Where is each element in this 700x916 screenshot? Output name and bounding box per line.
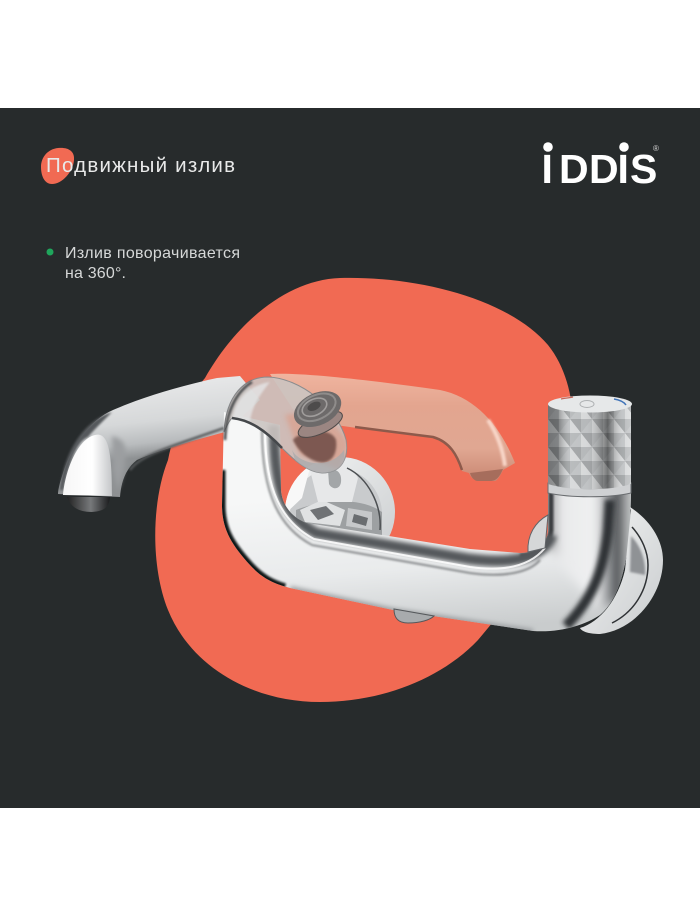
column shading [547, 494, 631, 610]
heading: moving spout [41, 148, 235, 184]
salmon blob background [155, 278, 573, 702]
glass salmon tint [285, 414, 348, 470]
dark panel [0, 108, 700, 808]
cap temperature arc: red [561, 397, 573, 399]
column inner shadow [520, 490, 551, 556]
ghost spout body [270, 374, 515, 481]
lower soft shading [290, 590, 533, 633]
dark left edge of swivel [225, 382, 252, 440]
outer dark edge [222, 470, 285, 587]
wall plate: right [528, 507, 663, 634]
handle with diamond knurl [548, 396, 632, 497]
cap temperature arc: blue [614, 399, 626, 405]
glass left highlight [232, 382, 270, 422]
bullet text: на 360°. [65, 265, 126, 282]
bullet dot [46, 248, 54, 256]
bullet text: Излив поворачивается [65, 245, 240, 262]
spout tip highlight [63, 435, 112, 496]
spout nozzle [67, 497, 110, 512]
logo letters: IDDIS [542, 146, 657, 192]
handle knurl [548, 403, 631, 489]
spout dark reflection [130, 428, 224, 470]
ghost spout: rotated position [270, 374, 515, 481]
wall plate: rear left [286, 457, 395, 536]
swivel glass [224, 377, 347, 473]
lower band [292, 450, 344, 473]
swivel glass overlay with aerator [224, 377, 350, 476]
faucet illustration [58, 374, 663, 634]
main body tube [222, 412, 635, 633]
cap symbol [580, 400, 594, 408]
logo: iDDiS [542, 142, 659, 192]
tube top reflection [274, 425, 552, 561]
ghost spout inner reflection [355, 427, 462, 470]
chrome spout: current position [58, 376, 260, 512]
bullet text block [46, 245, 240, 282]
handle collar [548, 483, 631, 497]
handle top cap [548, 396, 632, 412]
ghost spout nozzle [470, 469, 503, 481]
column dark band [566, 500, 610, 626]
aerator [285, 384, 350, 443]
bottom valve stub [394, 609, 434, 623]
handle shading [548, 403, 631, 489]
glass inner shadow [293, 431, 336, 463]
infographic canvas [0, 108, 700, 808]
spout body [58, 376, 260, 497]
logo registered mark: ® [653, 144, 659, 153]
heading accent blob [41, 148, 74, 184]
inner ring line [347, 468, 380, 530]
heading text: Подвижный излив [46, 154, 235, 177]
logo i dots [543, 142, 629, 152]
